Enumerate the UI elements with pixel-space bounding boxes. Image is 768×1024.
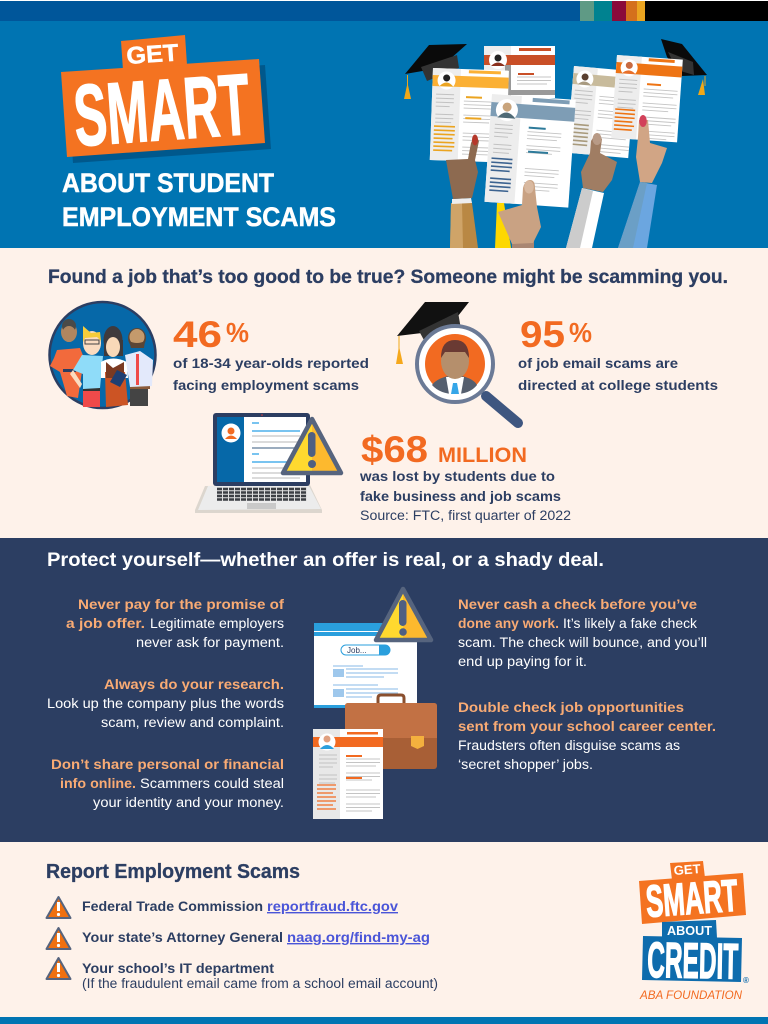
stat: 68 million (359, 429, 571, 523)
logo: get smart: SMART (71, 56, 253, 165)
tip: double check (458, 700, 716, 772)
title: EMPLOYMENT SCAMS (62, 202, 336, 232)
stat: 95 percent: of job email scams are (518, 355, 678, 371)
hand: right brown (566, 133, 617, 248)
tip: personal info: your identity and your money. (93, 795, 284, 810)
illustration: hands holding resumes (404, 39, 707, 248)
tip: never cash a check (458, 597, 707, 669)
tip: do your research: scam, review and complaint. (101, 715, 284, 730)
tip: never pay (66, 597, 285, 650)
logo: get smart: GET (126, 39, 180, 70)
icon: browser window: Job... (347, 646, 367, 655)
hand: right tan (618, 115, 667, 248)
report line: ftc: reportfraud.ftc.gov (267, 898, 398, 914)
tip: never cash a check: end up paying for it. (458, 654, 587, 669)
tip: do your research (47, 677, 284, 730)
resume: blue (484, 94, 576, 208)
resume: orange (611, 55, 683, 142)
logo: get smart about credit: GET (673, 861, 701, 878)
person: woman in orange dress (50, 319, 84, 398)
tip: personal info: Don’t share personal or financial (51, 757, 284, 772)
tip: do your research: Look up the company plus the words (47, 696, 284, 711)
stat: 68 million: was lost by students due to (359, 468, 555, 484)
stat: 46 percent: facing employment scams (173, 377, 359, 393)
tip: double check: Fraudsters often disguise scams as (458, 738, 680, 753)
stat: 46 percent: of 18-34 year-olds reported (173, 355, 369, 371)
heading: report: Report Employment Scams (46, 860, 300, 883)
logo: get smart about credit: ® (743, 976, 749, 985)
report line: school it: (If the fraudulent email came from a school email account) (82, 976, 438, 991)
hand: center (495, 180, 541, 248)
tip: never pay: Legitimate employers (150, 616, 284, 631)
icon: warning sign (376, 589, 431, 640)
icon: warning 1 (46, 897, 70, 918)
tip: double check: sent from your school career center. (458, 719, 716, 734)
icon: browser window (314, 623, 417, 708)
tip: never pay: a job offer. (66, 616, 145, 631)
person: man with red tie (125, 328, 153, 406)
stat: 46 percent: 46 (173, 314, 222, 355)
logo: get smart (61, 35, 271, 165)
panel: protect yourself (0, 538, 768, 842)
icon: graduation cap with magnifier (396, 302, 518, 423)
header band (0, 0, 768, 248)
logo: get smart about credit: ABA FOUNDATION (639, 988, 742, 1002)
icon: laptop with warning (195, 413, 341, 513)
tip: double check: Double check job opportunities (458, 700, 684, 715)
report line: attorney general: Your state’s Attorney General (82, 929, 283, 945)
resume: tan (566, 66, 636, 158)
icon: group of people (50, 302, 156, 408)
tip: do your research: Always do your research. (104, 677, 284, 692)
stat: 68 million: fake business and job scams (360, 488, 561, 504)
icon: warning 2 (46, 928, 70, 949)
icon: left graduation cap (404, 44, 467, 99)
tip: never pay: never ask for payment. (136, 635, 284, 650)
hand: left (446, 134, 479, 248)
resume: yellow (430, 68, 509, 163)
report line: attorney general: naag.org/find-my-ag (287, 929, 430, 945)
icon: briefcase (345, 695, 437, 769)
panel: report employment scams (0, 842, 768, 1017)
stat: 68 million: Source: FTC, first quarter of 2022 (360, 508, 571, 523)
resume: red (484, 46, 555, 98)
report line: ftc: Federal Trade Commission (82, 898, 263, 914)
report line: ftc (82, 898, 398, 914)
illustration: browser, briefcase and resume (313, 589, 437, 819)
report line: attorney general (82, 929, 430, 945)
stat: 95 percent (518, 314, 718, 393)
stat: 95 percent: directed at college students (518, 377, 718, 393)
tip: never cash a check: done any work. (458, 616, 559, 631)
tip: never cash a check: It’s likely a fake check (563, 616, 697, 631)
person: woman with folder (101, 326, 128, 407)
person: man in red trousers (70, 326, 103, 407)
heading: protect yourself: Protect yourself—whether an offer is real, or a shady deal. (47, 549, 604, 571)
tip: never pay: Never pay for the promise of (78, 597, 285, 612)
title (62, 168, 336, 232)
footer band (0, 1017, 768, 1024)
tip: never cash a check: scam. The check will bounce, and you’ll (458, 635, 707, 650)
icon: right graduation cap (661, 39, 707, 95)
stat: 95 percent: 95 (520, 314, 565, 355)
tip: personal info: info online. (60, 776, 136, 791)
tip: never cash a check: Never cash a check before you’ve (458, 597, 698, 612)
panel: stats (0, 248, 768, 538)
stat: 68 million: $68 (361, 429, 428, 470)
stat: 46 percent: % (226, 317, 249, 348)
title: ABOUT STUDENT (62, 168, 274, 198)
report line: school it (82, 960, 438, 991)
icon: warning 3 (46, 958, 70, 979)
tip: personal info (51, 757, 284, 810)
tip: double check: ‘secret shopper’ jobs. (458, 757, 593, 772)
stat: 46 percent (173, 314, 369, 393)
tip: personal info: Scammers could steal (140, 776, 284, 791)
logo: get smart about credit (639, 861, 749, 1002)
stat: 95 percent: % (569, 317, 592, 348)
heading: found a job: Found a job that’s too good to be true? Someone might be scamming you. (48, 266, 728, 288)
icon: resume (313, 729, 383, 819)
report line: school it: Your school’s IT department (82, 960, 274, 976)
stat: 68 million: MILLION (438, 444, 527, 467)
logo: get smart about credit: ABOUT (667, 923, 712, 938)
